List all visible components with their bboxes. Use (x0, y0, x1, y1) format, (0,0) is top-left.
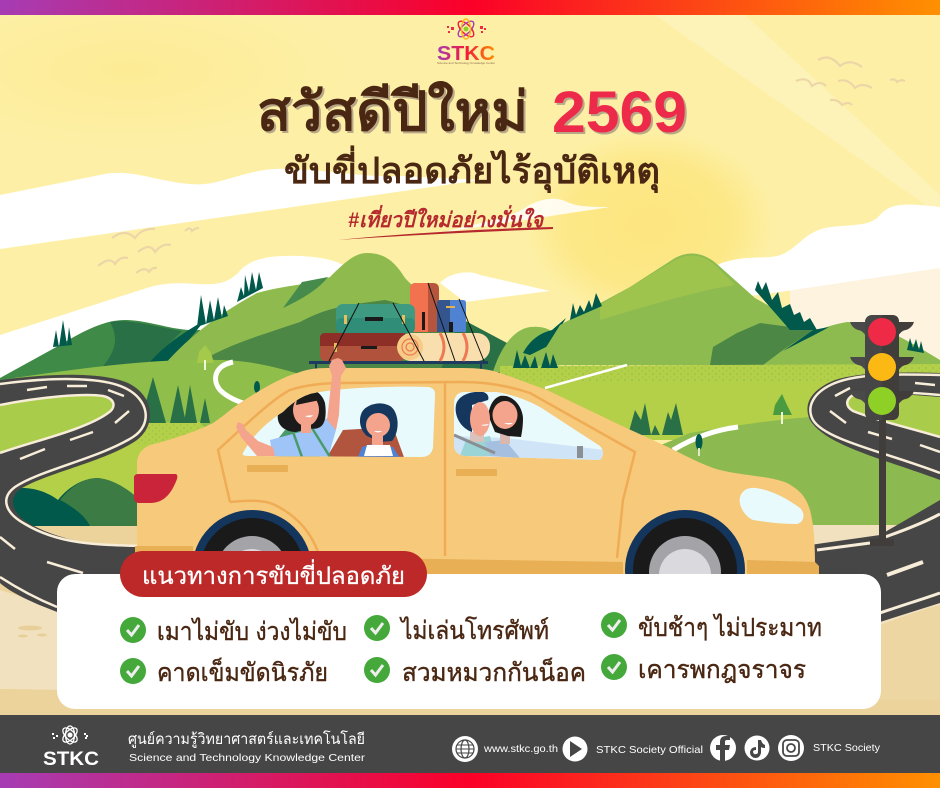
raised waving arm (327, 358, 346, 430)
green trees (140, 377, 940, 435)
logo: STKC top: STKC (437, 43, 495, 65)
door lines (218, 382, 635, 558)
facebook icon (710, 735, 736, 761)
website link: www.stkc.go.th (483, 743, 558, 755)
youtube link: STKC Society Official (596, 744, 703, 756)
pine trees (53, 272, 924, 368)
front wheel (625, 510, 745, 630)
sand ground (0, 525, 940, 715)
luggage on roof rack (309, 283, 490, 371)
traffic light (850, 315, 914, 546)
door handles (247, 465, 288, 472)
panel heading pill (120, 551, 427, 597)
tail light (134, 474, 177, 503)
bottom gradient bar (0, 773, 940, 788)
rear window (243, 387, 435, 457)
birds left (98, 228, 199, 273)
item: obey traffic rules: เคารพกฎจราจร (638, 656, 806, 684)
car body (137, 368, 818, 574)
right winding road (807, 373, 940, 622)
headlight (740, 488, 803, 524)
title: 2569 (554, 82, 689, 147)
logo: STKC top: Science and Technology Knowledge Center (437, 61, 495, 65)
tiktok icon (744, 736, 770, 760)
rear wheel (192, 510, 312, 630)
item: wear helmet: สวมหมวกกันน็อค (402, 657, 586, 687)
hashtag underline (338, 227, 553, 240)
sun glow (525, 130, 775, 320)
dark bushes (10, 478, 145, 526)
hashtag: #เที่ยวปีใหม่อย่างมั่นใจ (348, 205, 545, 232)
footer organisation name: Science and Technology Knowledge Center (129, 752, 366, 764)
title (257, 80, 689, 147)
footer organisation name: ศูนย์ความรู้วิทยาศาสตร์และเทคโนโลยี (128, 730, 365, 748)
front window (454, 392, 603, 460)
item: no drunk or drowsy driving: เมาไม่ขับ ง่วงไม่ขับ (157, 617, 347, 646)
item: no phone use (364, 615, 549, 645)
youtube link (562, 736, 703, 762)
rear passengers (270, 388, 405, 460)
subtitle: ขับขี่ปลอดภัยไร้อุบัติเหตุ (284, 145, 660, 194)
title: สวัสดีปีใหม่ (257, 80, 528, 142)
footer logo: STKC (43, 749, 99, 770)
right sky cream (790, 262, 940, 380)
small trees (197, 345, 792, 456)
footer organisation name (128, 730, 366, 764)
panel: safe driving guidelines (57, 551, 881, 709)
logo: STKC top (437, 19, 495, 65)
car (134, 358, 819, 574)
panel heading pill: แนวทางการขับขี่ปลอดภัย (142, 559, 405, 590)
left winding road (0, 375, 150, 613)
birds right (796, 58, 905, 105)
clouds (0, 169, 940, 380)
instagram icon (778, 735, 881, 761)
lower trim (135, 546, 819, 574)
driver and partner (454, 392, 604, 460)
item: drive slowly and carefully: ขับช้าๆ ไม่ประมาท (638, 613, 822, 642)
top gradient bar (0, 0, 940, 15)
footer logo (43, 725, 99, 770)
meadow fields (0, 360, 940, 530)
item: wear seat belt: คาดเข็มขัดนิรภัย (157, 657, 328, 687)
left waving arm (236, 422, 275, 456)
title: สวัสดีปีใหม่ (259, 82, 530, 144)
instagram icon: STKC Society (813, 742, 881, 754)
website link (452, 736, 558, 762)
title: 2569 (552, 80, 687, 145)
mountains (0, 253, 940, 382)
footer band (0, 715, 940, 773)
item: no phone use: ไม่เล่นโทรศัพท์ (399, 616, 549, 645)
